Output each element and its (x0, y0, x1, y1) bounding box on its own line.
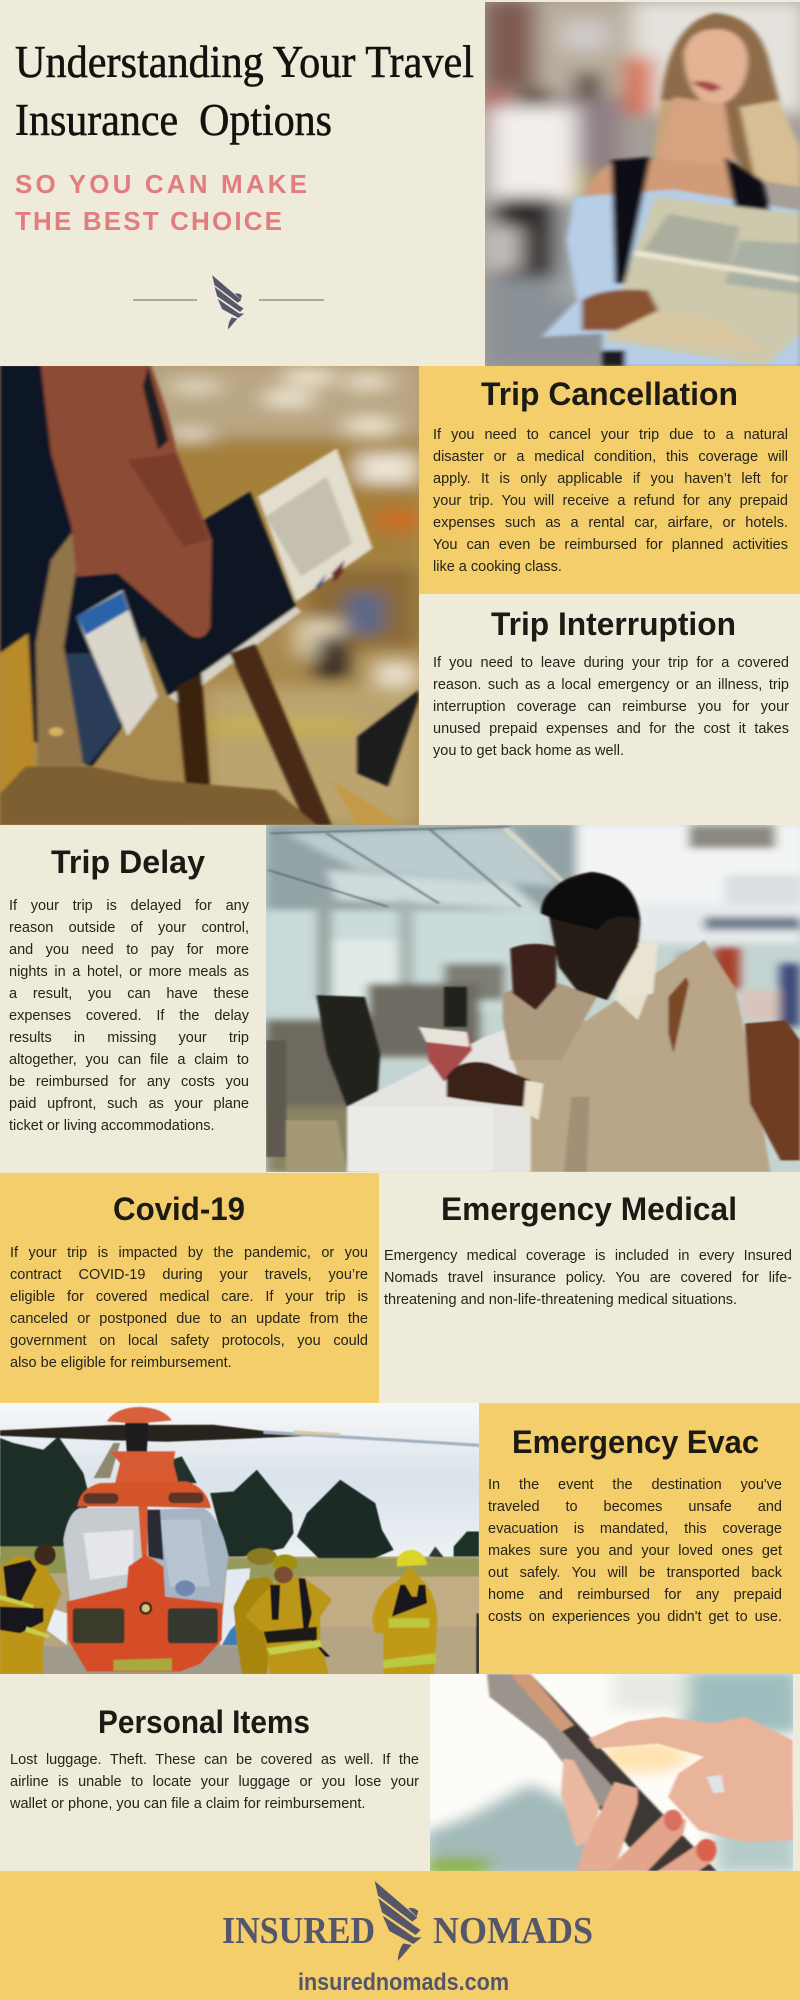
photo: rescue helicopter with firefighters (0, 1403, 479, 1674)
text block: you to get back home as well. (433, 743, 624, 759)
logo: insured nomads: INSURED (222, 1910, 375, 1952)
text block: wallet or phone, you can file a claim for reimbursement. (10, 1796, 365, 1812)
text block (10, 1752, 419, 1812)
photo: hands holding a smartphone (430, 1674, 793, 1871)
panel: trip cancellation (419, 366, 800, 594)
panel: header (0, 0, 485, 366)
panel: personal items (0, 1674, 430, 1871)
panel: trip interruption (419, 594, 800, 825)
panel: emergency evac (479, 1403, 800, 1674)
text block: disaster or a medical condition, this coverage will (433, 449, 788, 465)
text block: like a cooking class. (433, 559, 562, 575)
text block (433, 655, 789, 759)
text block: also be eligible for reimbursement. (10, 1355, 232, 1371)
photo: hand holding passport and boarding pass (0, 366, 419, 825)
website url: insurednomads.com (298, 1969, 509, 1996)
text block: airline is unable to locate your luggage or you lose your (10, 1774, 419, 1790)
panel: footer (0, 1871, 800, 2000)
heading: Trip Delay (51, 844, 205, 880)
text block: ticket or living accommodations. (9, 1118, 214, 1134)
title (15, 37, 474, 145)
subtitle: SO YOU CAN MAKE (15, 169, 307, 199)
text block: home and reimbursed for any prepaid (488, 1587, 782, 1603)
text block: You can even be reimbursed for planned activities (433, 537, 788, 553)
panel: trip delay (0, 825, 266, 1173)
text block: If your trip is impacted by the pandemic, or you (10, 1245, 368, 1261)
panel: covid-19 (0, 1173, 379, 1403)
photo: woman reading a map (485, 2, 800, 366)
text block: costs on experiences you didn't get to use. (488, 1609, 782, 1625)
text block (433, 427, 788, 575)
photo: stressed traveller at check-in desk (266, 825, 800, 1172)
text block: out safely. You will be transported back (488, 1565, 782, 1581)
text block: eligible for covered medical care. If your trip is (10, 1289, 368, 1305)
text block: If you need to leave during your trip for a covered (433, 655, 789, 671)
text block: Lost luggage. Theft. These can be covered as well. If the (10, 1752, 419, 1768)
heading: Covid-19 (113, 1191, 245, 1227)
text block: Nomads travel insurance policy. You are covered for life- (384, 1270, 792, 1286)
text block: threatening and non-life-threatening medical situations. (384, 1292, 737, 1308)
text block: traveled to becomes unsafe and (488, 1499, 782, 1515)
text block: expenses covered. If the delay (9, 1008, 249, 1024)
heading: Trip Interruption (491, 606, 736, 642)
heading: Emergency Medical (441, 1191, 737, 1227)
text block: interruption coverage can reimburse you for your (433, 699, 789, 715)
text block (9, 898, 249, 1134)
text block: makes sure you and your loved ones get (488, 1543, 782, 1559)
text block (384, 1248, 792, 1308)
text block: nights in a hotel, or more meals as (9, 964, 249, 980)
panel: emergency medical (379, 1173, 800, 1403)
text block: If your trip is delayed for any (9, 898, 249, 914)
logo: insured nomads: NOMADS (433, 1910, 593, 1952)
heading: Trip Cancellation (481, 376, 738, 412)
subtitle: THE BEST CHOICE (15, 206, 282, 236)
text block: reason. such as a local emergency or an illness, trip (433, 677, 789, 693)
text block: unused prepaid expenses and for the cost it takes (433, 721, 789, 737)
text block: If you need to cancel your trip due to a natural (433, 427, 788, 443)
text block: expenses such as a rental car, airfare, or hotels. (433, 515, 788, 531)
text block: Emergency medical coverage is included in every Insured (384, 1248, 792, 1264)
heading: Personal Items (98, 1704, 310, 1740)
text block: paid upfront, such as your plane (9, 1096, 249, 1112)
text block: reason outside of your control, (9, 920, 249, 936)
text block: contract COVID-19 during your travels, you’re (10, 1267, 368, 1283)
text block (488, 1477, 782, 1625)
text block: government on local safety protocols, you could (10, 1333, 368, 1349)
text block (10, 1245, 368, 1371)
text block: and you need to pay for more (9, 942, 249, 958)
text block: a result, you can have these (9, 986, 249, 1002)
text block: altogether, you can file a claim to (9, 1052, 249, 1068)
text block: apply. It is only applicable if you haven’t left for (433, 471, 788, 487)
text block: canceled or postponed due to an update from the (10, 1311, 368, 1327)
title: Insurance Options (15, 95, 332, 145)
icon: logo wing with divider lines (133, 275, 324, 330)
text block: evacuation is mandated, this coverage (488, 1521, 782, 1537)
heading: Emergency Evac (512, 1424, 759, 1460)
text block: In the event the destination you've (488, 1477, 782, 1493)
subtitle (15, 169, 307, 236)
logo: insured nomads (222, 1881, 593, 1961)
text block: your trip. You will receive a refund for any prepaid (433, 493, 788, 509)
text block: results in missing your trip (9, 1030, 249, 1046)
text block: be reimbursed for any costs you (9, 1074, 249, 1090)
